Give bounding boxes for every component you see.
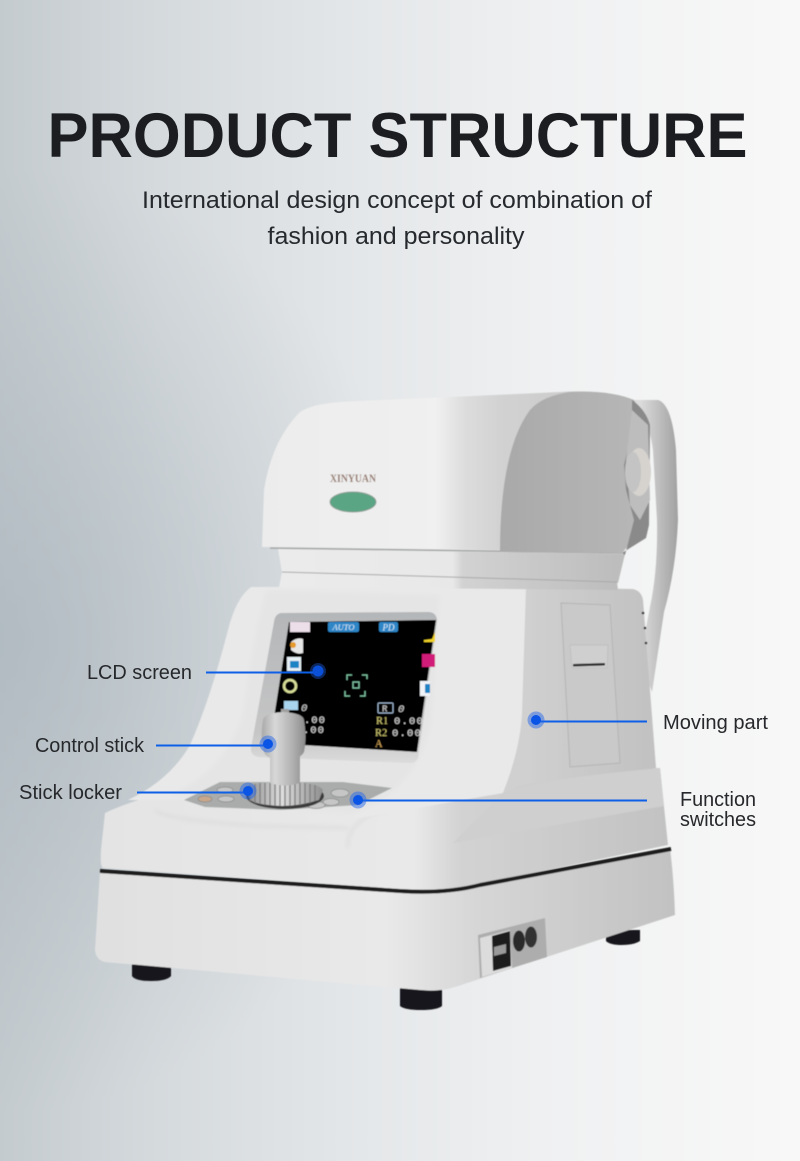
callout: Function switches: switches [680,809,756,831]
callout: Control stick: Control stick [35,735,145,757]
subtitle: fashion and personality [268,223,524,250]
screen readouts: .00 [304,715,326,727]
control stick [262,709,306,786]
connector panel [478,918,547,978]
joystick control panel [184,782,392,810]
callout: Moving part: Moving part [663,712,768,734]
screen readouts [301,703,424,750]
title: PRODUCT STRUCTURE [48,101,748,171]
screen readouts: R1 [376,716,388,727]
side knob [625,448,651,496]
LCD screen: PD [382,622,395,632]
side vent dots [642,612,647,644]
callout: Function switches [350,789,756,831]
callout: Stick locker [19,782,256,804]
body side panel [561,603,620,767]
base groove [100,849,671,892]
screen readouts: 0 [301,703,307,715]
rear support arm [633,400,678,692]
plateau contour lines [155,792,500,848]
subtitle [142,187,652,250]
screen side icons [291,638,303,654]
green button [330,492,376,512]
base top surface on side [453,768,664,843]
callout: Moving part [528,712,768,734]
main body front [128,587,530,818]
LCD screen: AUTO [331,622,355,632]
screen readouts: 0.00 [392,728,422,740]
printer slot [570,645,608,668]
callout: Function switches: Function [680,789,756,811]
screen readouts: A [375,739,383,750]
callout: Stick locker: Stick locker [19,782,122,804]
device: auto refractometer [95,391,678,1010]
LCD screen [270,620,436,752]
body top step [279,572,618,590]
screen readouts: R2 [375,728,387,739]
callout: LCD screen: LCD screen [87,662,192,684]
upper base [101,768,668,890]
panel buttons [198,787,349,808]
main body side [503,587,656,793]
focus target [345,675,367,696]
device feet [132,930,640,1010]
screen readouts: .00 [303,725,325,737]
subtitle: International design concept of combination of [142,187,652,214]
head rear bracket [622,400,650,555]
lower base [95,848,675,991]
screen tabs [290,622,310,632]
LCD bezel [251,612,437,763]
measuring head [262,391,642,553]
screen readouts: 0 [398,704,404,716]
callout: LCD screen [87,662,326,684]
stick gear [246,782,324,809]
screen readouts: R [382,704,388,714]
brand logo: XINYUAN [330,473,377,485]
screen readouts: 0.00 [394,716,424,728]
head dark side [500,392,646,553]
screen recess shading [170,590,440,815]
callout: Control stick [35,735,276,757]
